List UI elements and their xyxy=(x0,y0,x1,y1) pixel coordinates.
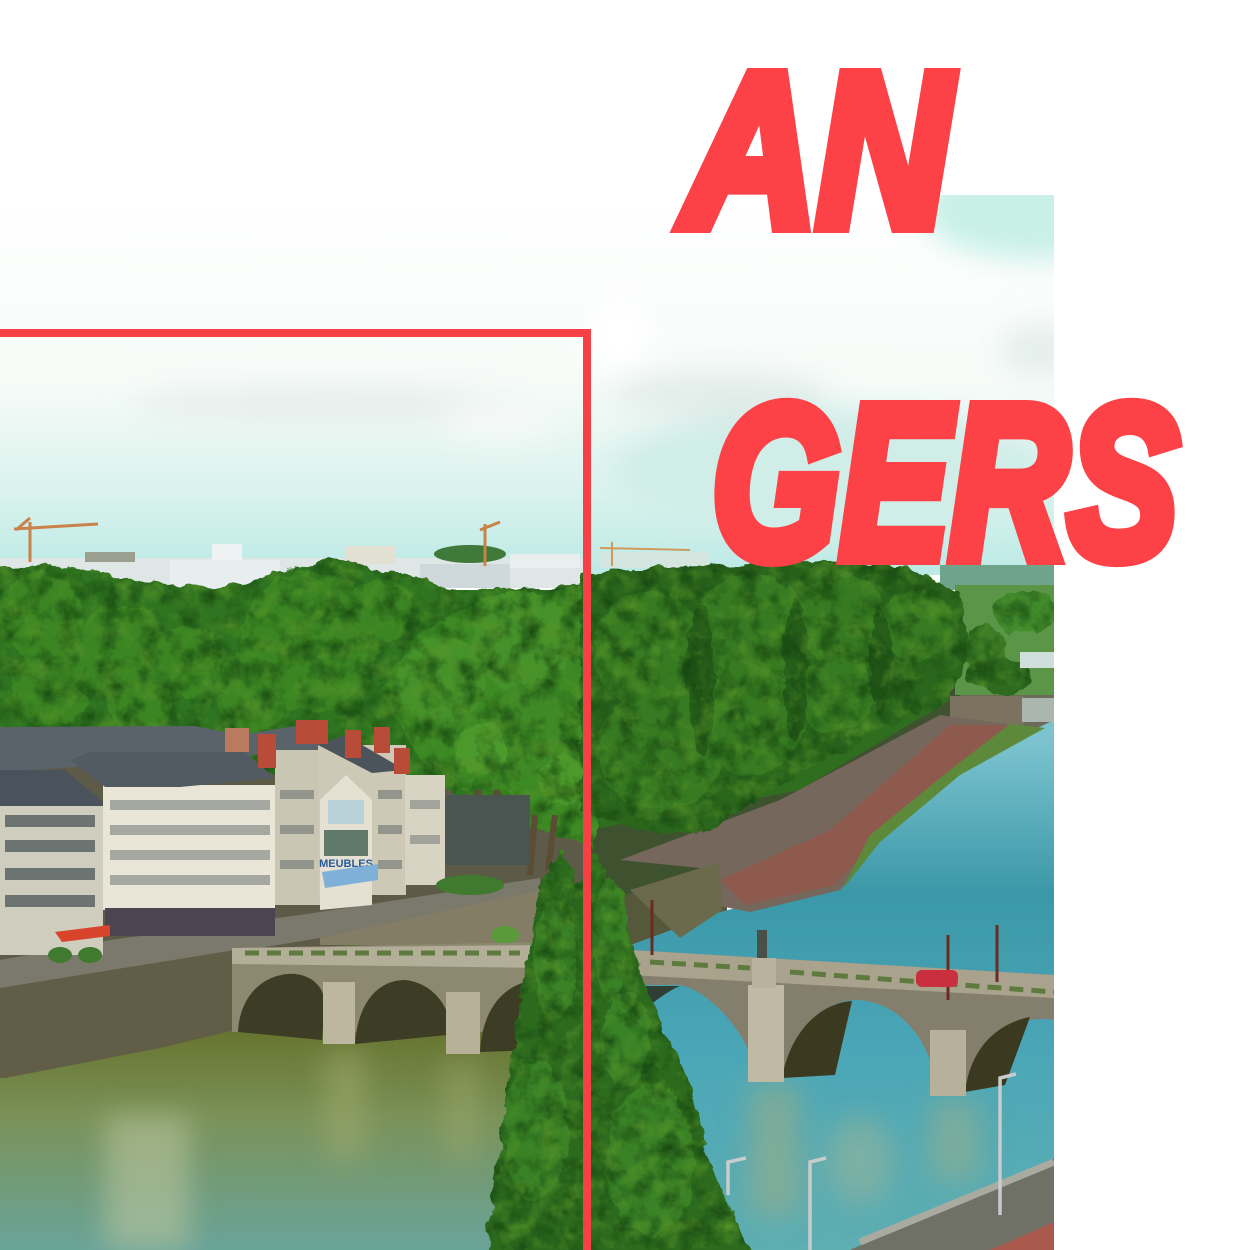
shop sign xyxy=(320,775,372,910)
sky with clouds xyxy=(0,195,1054,575)
parapet flowers xyxy=(245,953,1054,992)
bridge right section xyxy=(630,950,1054,1095)
chimneys xyxy=(225,720,410,774)
stone bridge xyxy=(232,900,1054,1096)
building: meubles block xyxy=(318,745,406,895)
water: left river xyxy=(0,1030,512,1250)
buildings: MEUBLES xyxy=(319,858,373,870)
building: right block xyxy=(405,775,445,885)
stone wall along street xyxy=(320,890,540,945)
shopfronts xyxy=(105,908,275,936)
water: right river channel xyxy=(590,720,1054,1250)
title: AN: AN xyxy=(680,30,954,272)
building roofs back row xyxy=(0,726,320,770)
street and road xyxy=(0,878,540,988)
car park under trees xyxy=(445,795,530,865)
ground base under the scene xyxy=(0,590,1054,988)
far right trees and riverbank xyxy=(950,585,1057,726)
statue and lamps xyxy=(752,958,776,988)
quay wall left xyxy=(0,950,235,1078)
red car xyxy=(916,970,958,987)
photo: Angers riverside and bridge xyxy=(0,195,1054,1250)
tree mass: right avenue xyxy=(580,560,970,835)
water reflections xyxy=(105,1050,980,1250)
red frame line xyxy=(0,333,587,1250)
embankment quay xyxy=(620,715,1045,938)
bridge left section xyxy=(232,942,545,1032)
windows xyxy=(5,790,440,907)
street plants xyxy=(48,875,519,963)
distant city skyline and cranes xyxy=(0,518,1054,592)
building: left block xyxy=(0,805,103,955)
street lamps and lower right road xyxy=(728,1074,1054,1250)
building: narrow block xyxy=(275,750,320,905)
tree mass: centre trees by the red line xyxy=(380,585,596,875)
poplar tree xyxy=(486,852,752,1250)
building: centre white block xyxy=(103,785,275,910)
buildings xyxy=(0,720,445,955)
tree mass: left xyxy=(0,558,600,820)
